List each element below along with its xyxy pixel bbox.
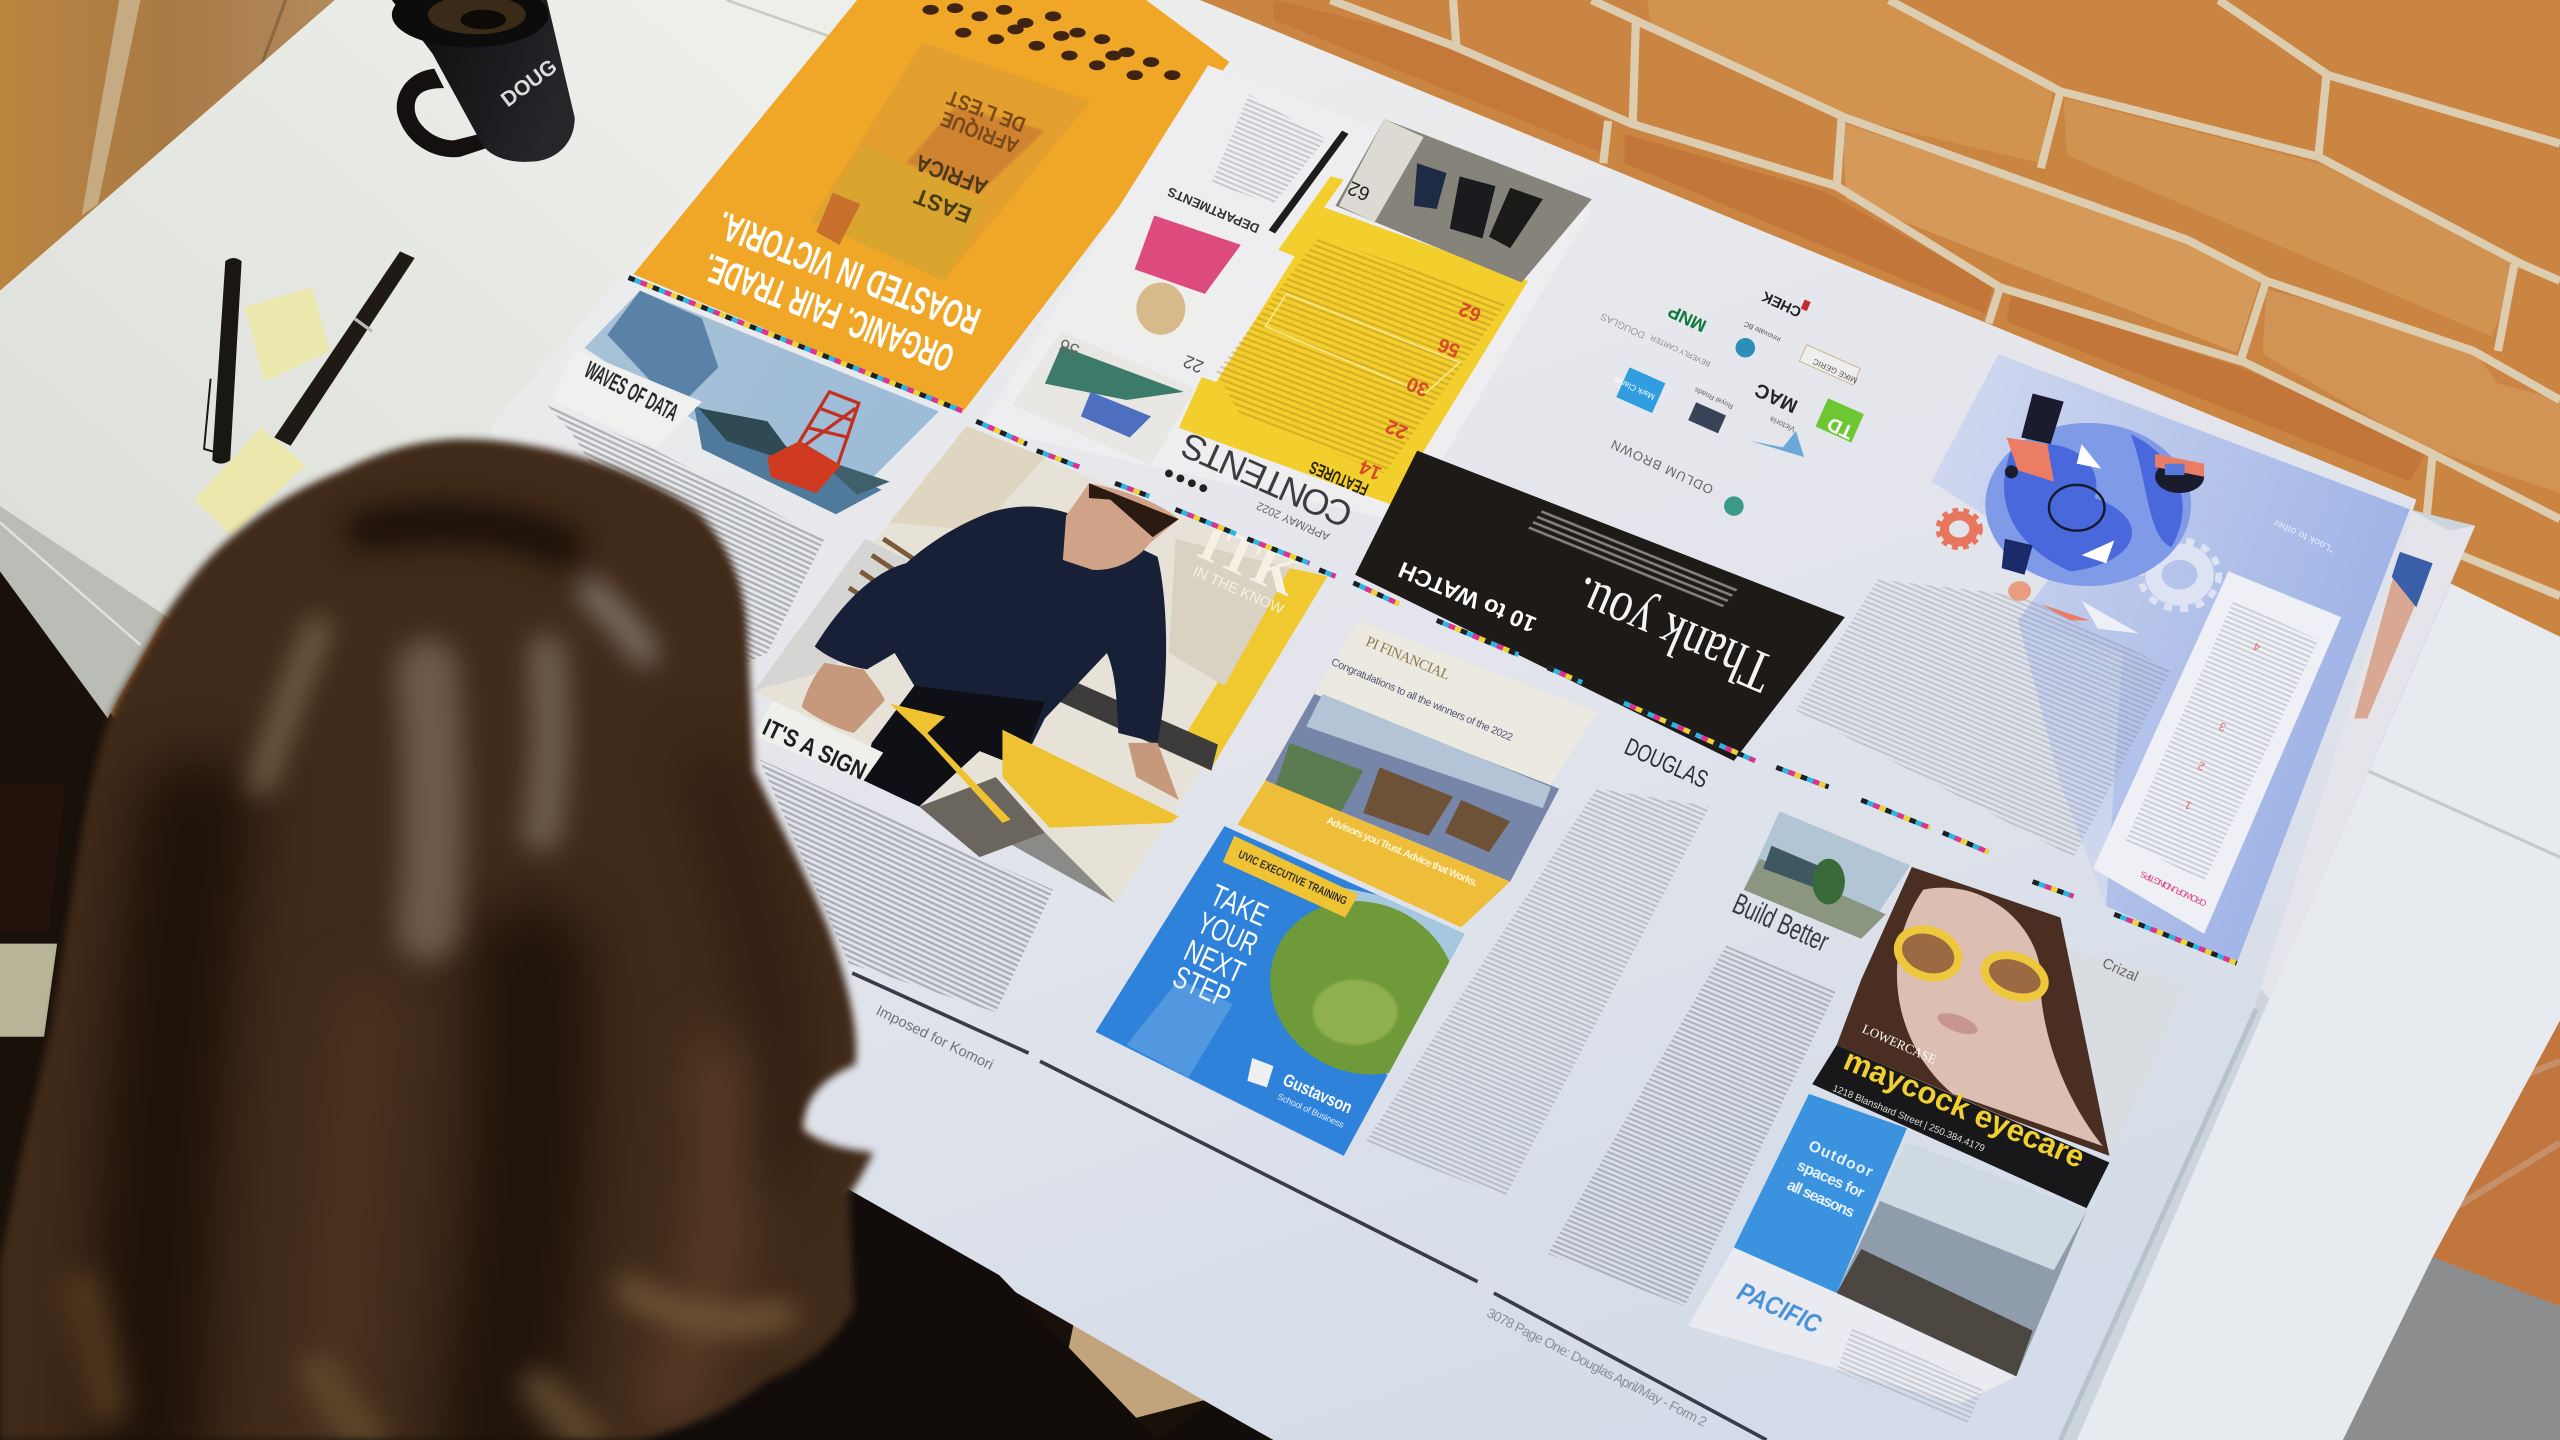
photo: red buoy: [584, 291, 939, 514]
white tips column: 4: [2251, 639, 2262, 653]
body copy: [1796, 580, 2171, 857]
article: build better: Build Better: [1728, 887, 1834, 959]
pull quote: "Look to other: [2271, 516, 2336, 554]
ad: pacific outdoor spaces: Outdoor: [1806, 1138, 1875, 1181]
shelf stripes: [849, 539, 913, 607]
ad: maycock eyecare: [1812, 867, 2186, 1208]
brick wall tones and mortar: [1273, 0, 2560, 1306]
ad: organic fair trade coffee: [633, 0, 1229, 411]
sponsors page: [1599, 287, 1864, 516]
yellow contents panel: 56: [1434, 333, 1463, 362]
white tips column: CROWDFUNDING TIPS: [2139, 869, 2208, 908]
section mark: in the know: ITK: [1190, 511, 1308, 608]
ad: PI Financial: [1238, 620, 1597, 927]
coffee mug: DOUG: [497, 55, 562, 112]
title tag: IT'S A SIGN: [758, 714, 870, 785]
ad: organic fair trade coffee: ROASTED IN VICTORIA.: [712, 202, 986, 342]
ad: UVic executive training: UVIC EXECUTIVE TRAINING: [1236, 849, 1349, 908]
ad: UVic executive training: NEXT: [1179, 933, 1250, 990]
ad: UVic executive training: [1096, 826, 1485, 1156]
sponsors page: ODLUM BROWN: [1609, 437, 1716, 497]
body copy: [547, 405, 824, 673]
contents page: DEPARTMENTS: [1165, 184, 1262, 236]
sponsors page: Victoria: [1768, 414, 1797, 434]
photo 62: three people: 62: [1345, 176, 1373, 205]
douglas masthead page: [1365, 733, 1712, 1197]
ad: UVic executive training: YOUR: [1192, 905, 1263, 962]
coffee bag: AFRIQUE: [938, 106, 1022, 157]
section mark: in the know: IN THE KNOW: [1190, 564, 1286, 618]
yellow sunglasses: [1891, 921, 2051, 1005]
ad: pacific outdoor spaces: all seasons: [1784, 1177, 1857, 1221]
sponsors page: Royal Roads: [1693, 385, 1735, 411]
ad: PI Financial: Advisors you Trust. Advice that Works.: [1325, 815, 1480, 889]
coffee mug: [392, 0, 575, 162]
photo 56: workshop: [1012, 331, 1195, 465]
dark shirt and shadow under the sheet: [653, 1189, 1273, 1440]
white tips column: 1: [2183, 798, 2194, 811]
yellow contents panel: [1179, 176, 1528, 504]
sponsors page: innovate BC: [1741, 319, 1782, 344]
white tips column: 2: [2196, 759, 2207, 772]
trim marks and slug lines: Imposed for Komori: [873, 1003, 996, 1074]
photo 22: pink dress: 22: [1180, 351, 1206, 377]
figure: person on laptop: [2155, 454, 2204, 493]
photo 22: pink dress: [1078, 212, 1244, 377]
coffee bag: DE L'EST: [944, 85, 1029, 136]
sponsors page: MAC: [1752, 378, 1801, 417]
ad: UVic executive training: Gustavson: [1280, 1069, 1355, 1118]
icon: pale gear: [2140, 540, 2219, 609]
coffee bag: AFRICA: [912, 150, 991, 201]
douglas masthead page: DOUGLAS: [1620, 733, 1712, 794]
coffee bag: [811, 42, 1091, 281]
ad: organic fair trade coffee: ORGANIC. FAIR TRADE.: [698, 245, 960, 379]
figure: person with book: [2002, 539, 2033, 601]
black page: thank you, 10 to watch: Thank you.: [1564, 564, 1781, 706]
ad: maycock eyecare: maycock eyecare: [1839, 1042, 2090, 1175]
yellow contents panel: 22: [1382, 415, 1411, 443]
figure: standing person: [2005, 393, 2064, 482]
sticky notes: [194, 287, 330, 536]
sponsors page: TD: [1824, 412, 1857, 443]
building photo: [1744, 811, 1910, 939]
ad: UVic executive training: TAKE: [1205, 877, 1273, 933]
black page: thank you, 10 to watch: [1355, 451, 1845, 761]
body copy: [759, 759, 1053, 1012]
ad: pacific outdoor spaces: spaces for: [1794, 1157, 1867, 1202]
white tips column: 3: [2217, 719, 2228, 733]
sponsors page: CHEK: [1759, 287, 1804, 319]
white tips column: [2093, 571, 2341, 934]
ad: UVic executive training: STEP: [1168, 959, 1236, 1015]
article spread: crowdfunding illustration: [1796, 354, 2410, 963]
ad: PI Financial: Congratulations to all the winners of the 2022: [1329, 656, 1515, 744]
ad: maycock eyecare: LOWERCASE: [1860, 1021, 1939, 1067]
title box: WAVES OF DATA: [580, 357, 683, 427]
icon: coral gear: [1938, 510, 1980, 548]
trim marks and slug lines: [852, 973, 1767, 1440]
ad: pacific outdoor spaces: PACIFIC: [1733, 1276, 1827, 1340]
black page: thank you, 10 to watch: 10 to WATCH: [1394, 557, 1540, 638]
yellow contents panel: FEATURES: [1306, 457, 1371, 500]
ad: pacific outdoor spaces: [1688, 1094, 2087, 1424]
trim marks and slug lines: 3078 Page One: Douglas April/May - Form 2: [1484, 1304, 1710, 1430]
photo 56: workshop: 56: [1056, 335, 1082, 361]
ad: maycock eyecare: 1218 Blanshard Street | 250.384.4179: [1831, 1083, 1986, 1155]
ad: maycock eyecare: Crizal: [2100, 956, 2140, 985]
yellow contents panel: 62: [1456, 297, 1484, 326]
ad: UVic executive training: School of Business: [1276, 1091, 1346, 1130]
photo 62: three people: [1336, 119, 1592, 282]
contents page: APR/MAY 2022: [1255, 499, 1332, 542]
printer colour bars: [629, 278, 2237, 963]
divider bar: [1269, 131, 1349, 233]
ad: PI Financial: PI FINANCIAL: [1363, 634, 1452, 684]
yellow contents panel: 30: [1403, 372, 1432, 401]
article page: waves of data: [547, 291, 939, 673]
feature photo: it's a sign: [754, 426, 1327, 1012]
contents page: [980, 65, 1592, 542]
sponsors page: DOUGLAS: [1599, 310, 1647, 340]
sponsors page: BEVERLY CARTER: [1649, 333, 1712, 369]
coffee beans: [922, 3, 1180, 80]
person's hair from behind: [0, 439, 873, 1440]
title box: [552, 349, 702, 447]
pens: [204, 251, 415, 464]
sponsors page: MIKE GERIC: [1811, 357, 1859, 385]
sponsors page: MNP: [1665, 301, 1709, 336]
departments list: [1211, 95, 1326, 204]
printed press sheet: [490, 0, 2475, 1440]
man in denim jacket: [802, 483, 1179, 807]
sponsors page: Mark Clarke: [1612, 375, 1656, 401]
coffee bag: EAST: [911, 183, 975, 229]
yellow sign pieces: [890, 704, 1179, 828]
contents heading: CONTENTS: [1175, 424, 1358, 536]
article: build better: [1548, 811, 1910, 1306]
globe: [1985, 423, 2191, 586]
yellow contents panel: 14: [1356, 455, 1385, 484]
